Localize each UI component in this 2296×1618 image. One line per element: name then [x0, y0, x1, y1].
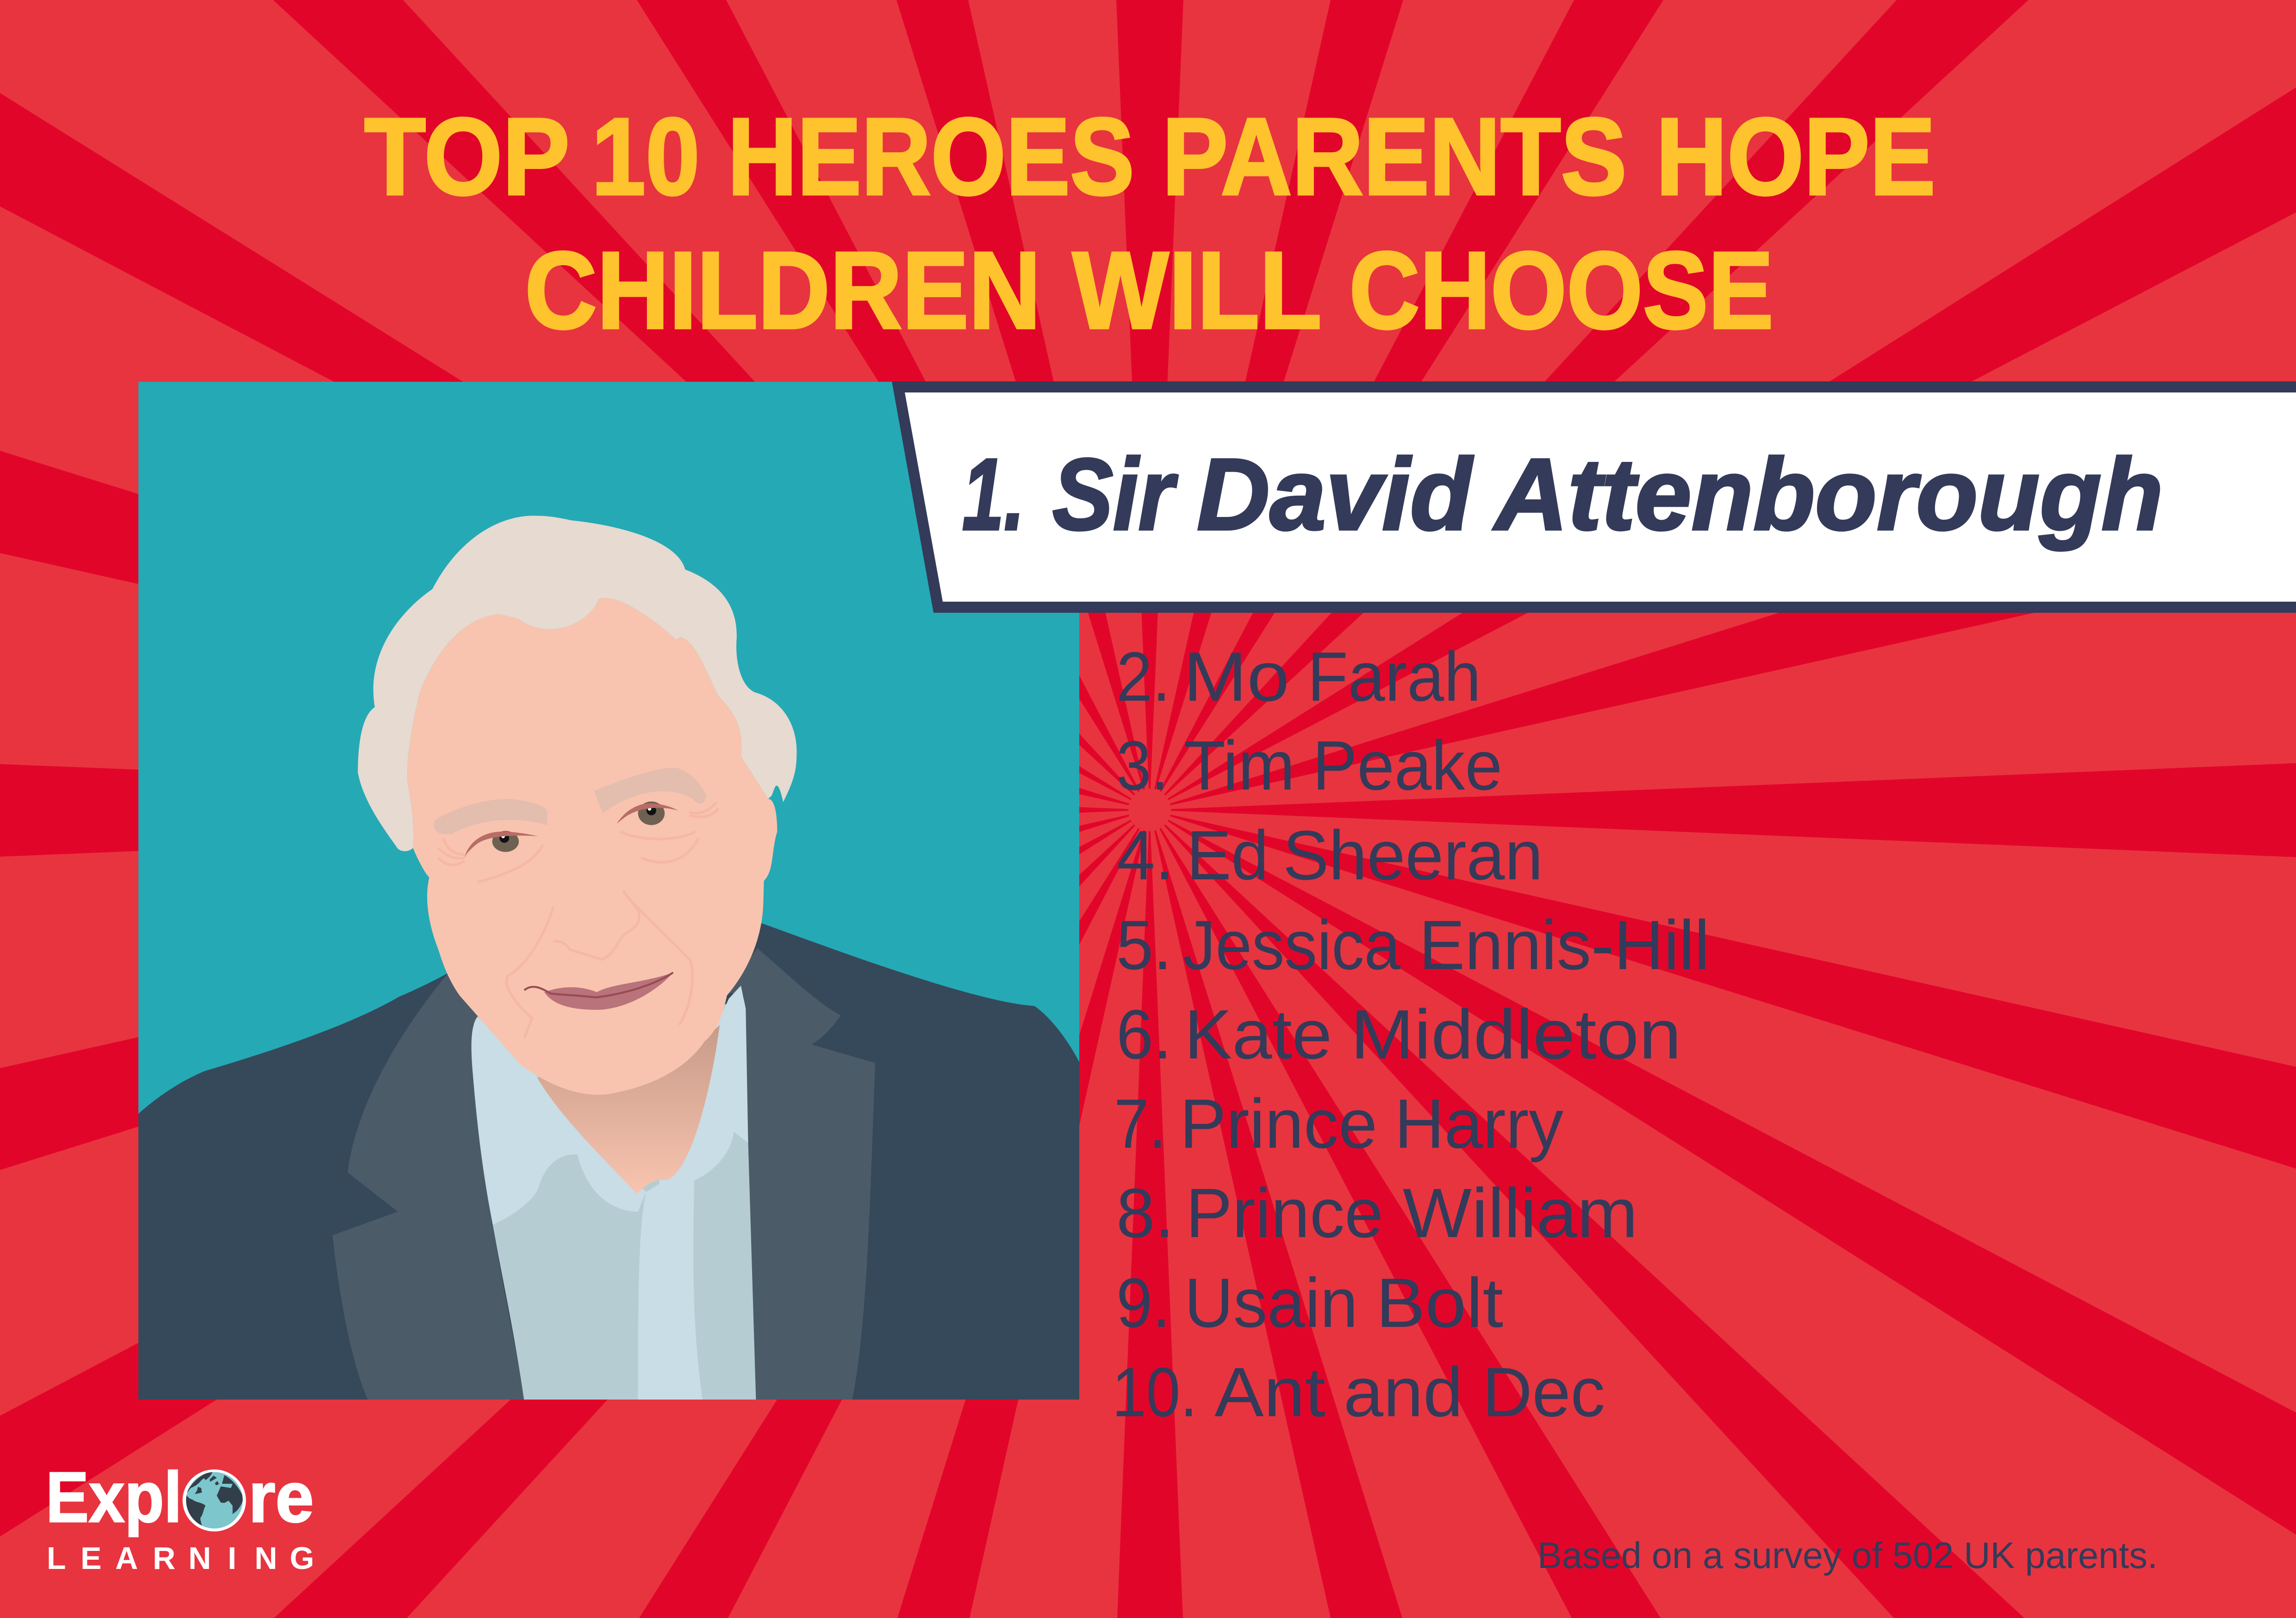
ranked list: heroes 2 to 10: Ant: [1214, 1353, 1325, 1431]
ranked list: heroes 2 to 10: Kate: [1184, 995, 1332, 1073]
title: [364, 95, 1935, 352]
ranked list: heroes 2 to 10: 10.: [1112, 1353, 1197, 1431]
ranked list: heroes 2 to 10: Prince: [1186, 1174, 1383, 1252]
ranked list: heroes 2 to 10: Usain: [1184, 1263, 1358, 1342]
title: HOPE: [1656, 95, 1935, 218]
ranked list: heroes 2 to 10: [1112, 637, 1710, 1431]
ranked list: heroes 2 to 10: Peake: [1313, 726, 1502, 804]
panel: portrait background: [138, 382, 1079, 1400]
footnote: survey source: Based on a survey of 502 UK parents.: [1537, 1535, 2158, 1576]
ranked list: heroes 2 to 10: 3.: [1116, 726, 1169, 804]
ranked list: heroes 2 to 10: 9.: [1116, 1263, 1170, 1342]
ranked list: heroes 2 to 10: Middleton: [1350, 995, 1681, 1073]
ranked list: heroes 2 to 10: Prince: [1180, 1084, 1377, 1163]
title: CHOOSE: [1349, 229, 1773, 352]
ranked list: heroes 2 to 10: Ennis-Hill: [1419, 906, 1710, 984]
ranked list: heroes 2 to 10: 7.: [1114, 1084, 1166, 1163]
ranked list: heroes 2 to 10: Bolt: [1376, 1263, 1503, 1342]
logo: Explore Learning: Expl: [46, 1457, 182, 1537]
logo: Explore Learning: re: [249, 1457, 314, 1537]
ranked list: heroes 2 to 10: and: [1344, 1353, 1463, 1431]
ranked list: heroes 2 to 10: 5.: [1116, 906, 1172, 984]
logo: Explore Learning: [49, 1469, 312, 1569]
ranked list: heroes 2 to 10: Mo: [1183, 637, 1289, 716]
ranked list: heroes 2 to 10: 6.: [1116, 995, 1172, 1073]
ranked list: heroes 2 to 10: Tim: [1184, 726, 1295, 804]
title: PARENTS: [1162, 95, 1627, 218]
banner: number one hero: 1.: [962, 437, 1025, 551]
ranked list: heroes 2 to 10: Sheeran: [1283, 816, 1543, 894]
title: CHILDREN: [525, 229, 1041, 352]
title: HEROES: [728, 95, 1134, 218]
title: WILL: [1072, 229, 1322, 352]
banner: number one hero: David: [1197, 437, 1474, 551]
ranked list: heroes 2 to 10: William: [1403, 1174, 1638, 1252]
ranked list: heroes 2 to 10: 4.: [1117, 816, 1174, 894]
banner: number one hero: Attenborough: [1493, 437, 2163, 551]
ranked list: heroes 2 to 10: Farah: [1307, 637, 1481, 716]
ranked list: heroes 2 to 10: 8.: [1116, 1174, 1174, 1252]
title: 10: [591, 95, 700, 218]
ranked list: heroes 2 to 10: Harry: [1394, 1084, 1563, 1163]
illustration: portrait of Sir David Attenborough: [137, 516, 1080, 1402]
banner: number one hero: Sir: [1052, 437, 1178, 551]
ranked list: heroes 2 to 10: Ed: [1187, 816, 1269, 894]
logo: Explore Learning: LEARNING: [47, 1541, 314, 1576]
ranked list: heroes 2 to 10: Dec: [1482, 1353, 1605, 1431]
title: TOP: [364, 95, 570, 218]
ranked list: heroes 2 to 10: 2.: [1116, 637, 1170, 716]
ranked list: heroes 2 to 10: Jessica: [1183, 906, 1400, 984]
banner: number one hero: [892, 381, 2296, 613]
